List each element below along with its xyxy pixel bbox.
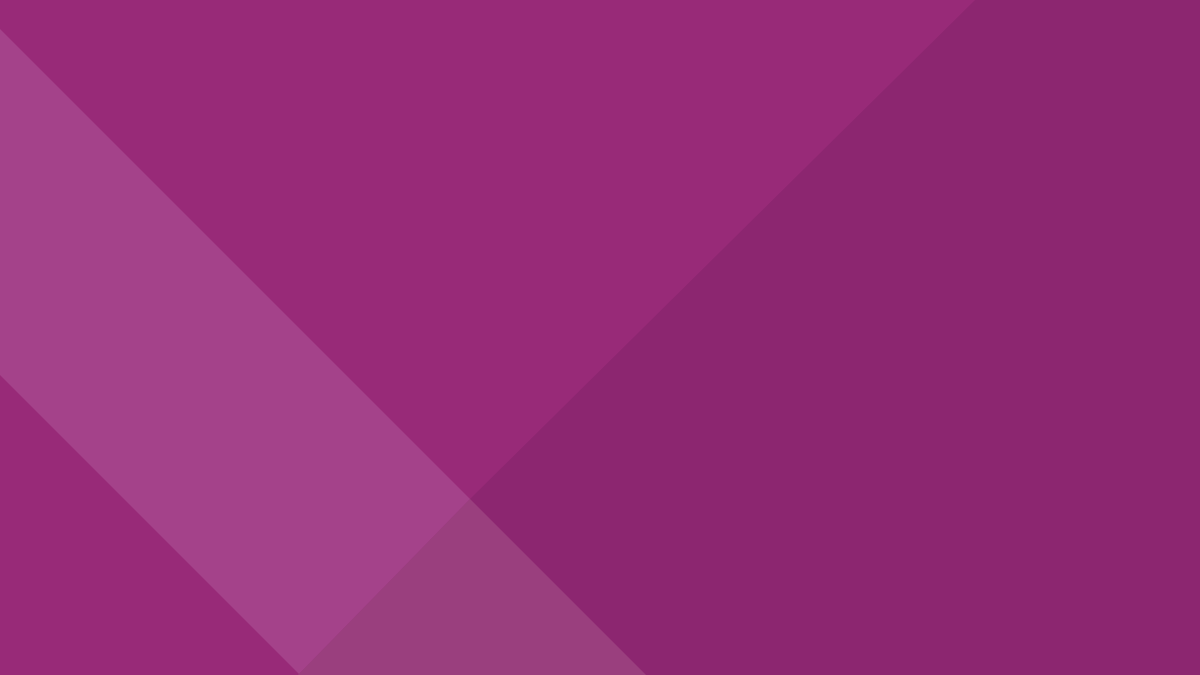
panel: dark right-hand polygon	[470, 0, 1200, 675]
panel: light diagonal band	[0, 29, 470, 675]
panel: muted overlap triangle	[298, 499, 646, 675]
